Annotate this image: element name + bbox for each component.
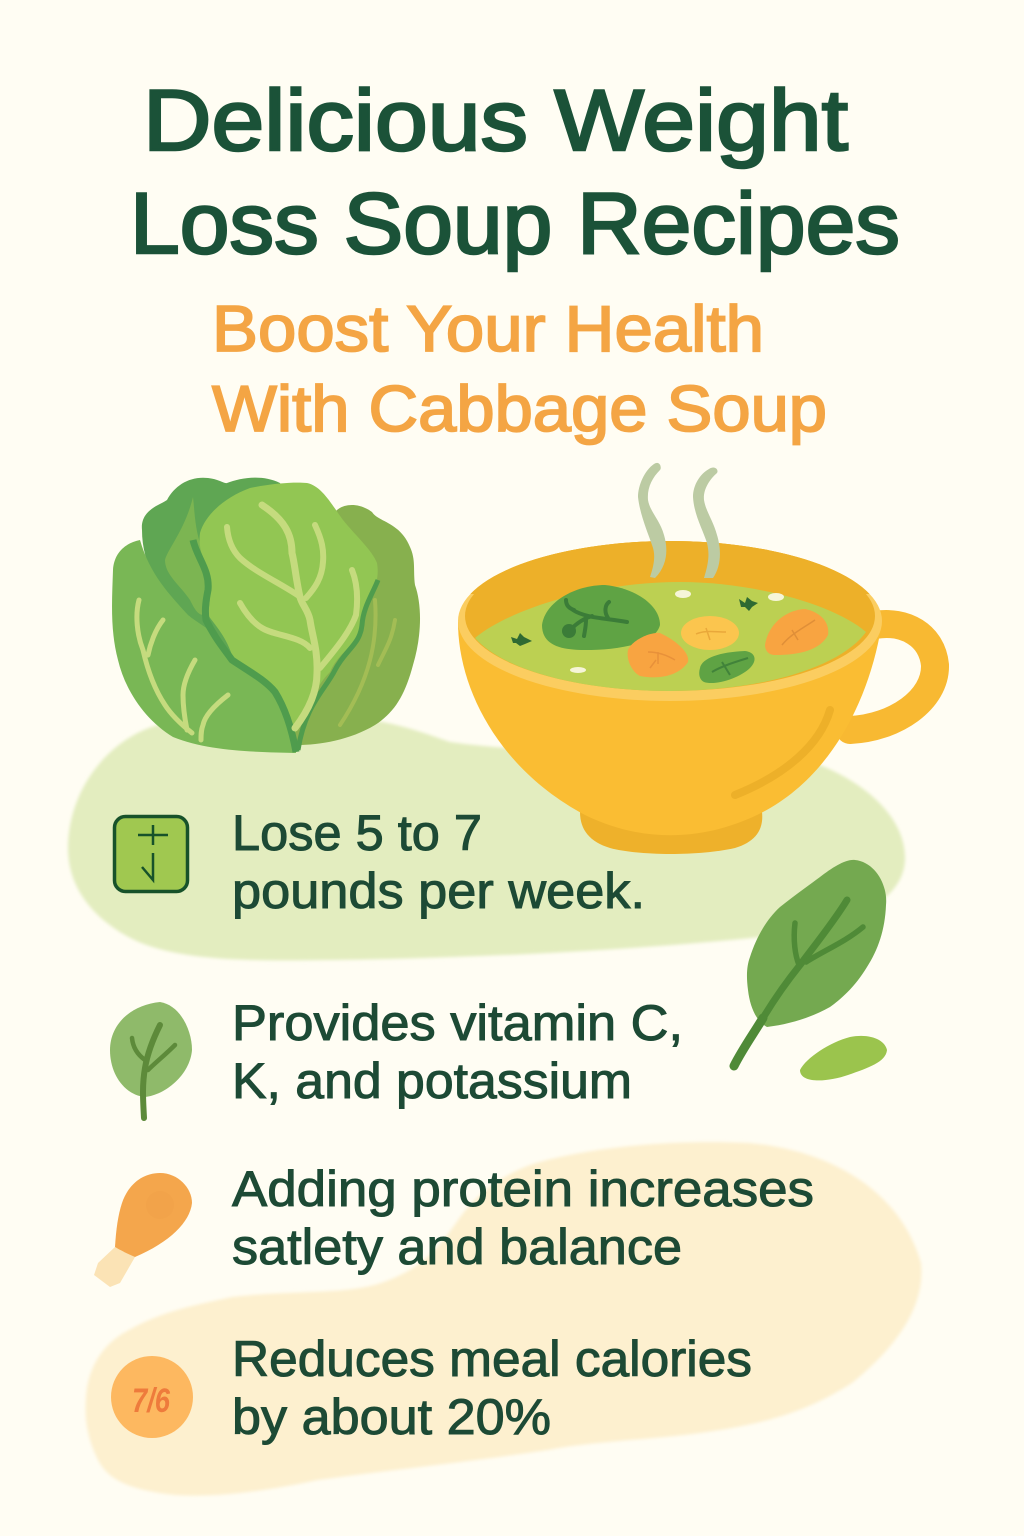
bowl rim	[458, 541, 882, 701]
icon: chicken drumstick	[94, 1173, 192, 1287]
title	[130, 73, 900, 272]
soup: small spinach leaf	[699, 651, 755, 683]
soup: large spinach leaf	[542, 585, 660, 650]
subtitle: With Cabbage Soup	[212, 372, 827, 445]
text: calories	[232, 1331, 752, 1445]
title: Delicious Weight	[143, 73, 848, 169]
bowl highlight	[735, 710, 830, 795]
illustration: small leaf	[800, 1036, 887, 1080]
text: lose weight: Lose 5 to 7	[232, 805, 482, 861]
bowl handle	[850, 624, 935, 730]
icon: leaf	[110, 1002, 192, 1118]
subtitle: Boost Your Health	[212, 292, 764, 365]
illustration: spinach leaf	[734, 860, 886, 1066]
soup: white dots	[570, 590, 784, 673]
background blob: green	[68, 715, 905, 960]
bowl foot	[580, 812, 762, 854]
bowl body	[458, 622, 882, 835]
text: lose weight	[232, 805, 645, 919]
subtitle	[212, 292, 827, 445]
soup: yellow slice	[681, 616, 739, 650]
title: Loss Soup Recipes	[130, 176, 900, 272]
text: protein: Adding protein increases	[232, 1161, 814, 1217]
icon: scale square	[114, 816, 188, 892]
text: calories: by about 20%	[232, 1389, 551, 1445]
bowl interior	[458, 541, 882, 701]
icon: percent badge	[111, 1356, 193, 1438]
soup: herbs	[511, 597, 758, 646]
text: vitamins: K, and potassium	[232, 1053, 632, 1109]
illustration: soup bowl with handle	[458, 463, 935, 854]
text: vitamins	[232, 995, 683, 1109]
soup: carrot slice	[628, 633, 688, 677]
icon: percent badge: 7/6	[132, 1382, 171, 1420]
text: protein: satlety and balance	[232, 1219, 682, 1275]
text: calories: Reduces meal calories	[232, 1331, 752, 1387]
steam	[638, 463, 720, 578]
illustration: cabbage	[112, 478, 420, 753]
text: vitamins: Provides vitamin C,	[232, 995, 683, 1051]
soup: carrot slice	[765, 609, 828, 655]
text: lose weight: pounds per week.	[232, 863, 645, 919]
text: protein	[232, 1161, 814, 1275]
soup	[475, 582, 866, 691]
background blob: orange	[86, 1142, 921, 1496]
